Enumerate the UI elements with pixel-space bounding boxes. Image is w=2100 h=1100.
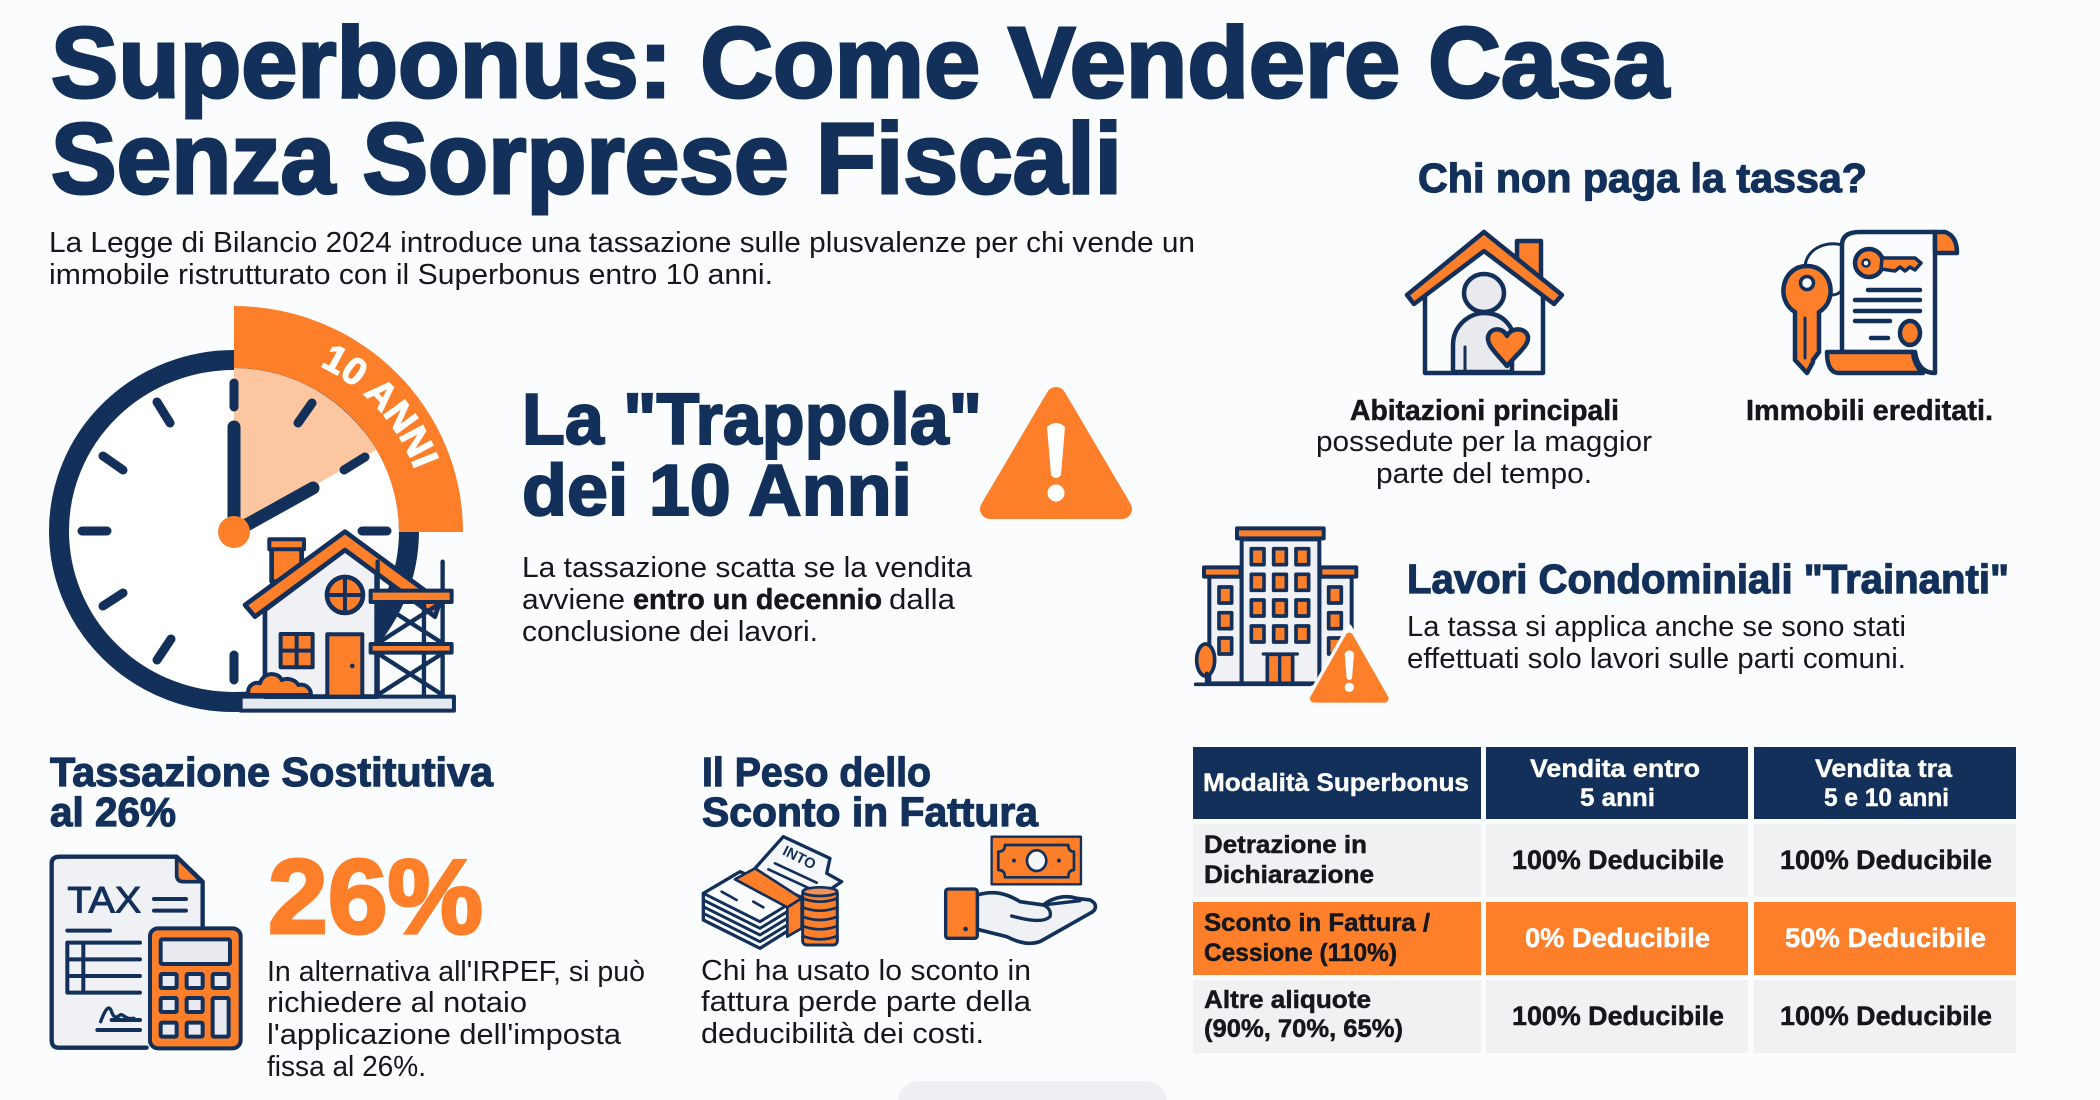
table: superbonus deducibility <box>1193 747 2016 1053</box>
table header: Vendita entro <box>1530 755 1700 783</box>
icon: stack of invoices and coins <box>703 837 842 948</box>
text: abitazioni principali: possedute per la maggior <box>1316 426 1652 458</box>
title: Senza Sorprese Fiscali <box>51 103 1122 215</box>
text: immobili ereditati: Immobili ereditati. <box>1746 395 1993 427</box>
text: trappola description <box>522 552 973 648</box>
footer pill (cut off) <box>898 1081 1167 1100</box>
text: sconto in fattura description: deducibilità dei costi. <box>701 1018 984 1050</box>
table row: sconto in fattura: Sconto in Fattura / <box>1204 909 1430 937</box>
table row: sconto in fattura <box>1193 902 2016 975</box>
intro text <box>49 227 1195 291</box>
table row: sconto in fattura: 50% Deducibile <box>1785 923 1986 953</box>
table row: detrazione in dichiarazione: Detrazione in <box>1204 831 1367 859</box>
table row: altre aliquote: 100% Deducibile <box>1780 1001 1992 1031</box>
table row: altre aliquote: 100% Deducibile <box>1512 1001 1724 1031</box>
heading: la trappola dei 10 anni: La "Trappola" <box>522 380 982 460</box>
icon: condominium building with warning <box>1196 528 1394 704</box>
text: sconto in fattura description: Chi ha usato lo sconto in <box>701 955 1031 987</box>
text: lavori condominiali trainanti: Lavori Condominiali "Trainanti" <box>1407 556 2009 602</box>
heading: chi non paga la tassa: Chi non paga la tassa? <box>1418 155 1867 201</box>
table row: detrazione in dichiarazione: 100% Deducibile <box>1780 845 1992 875</box>
heading: tassazione sostitutiva: al 26% <box>50 789 176 835</box>
icon: key and inheritance document <box>1783 232 1957 373</box>
stat: 26 percent: 26% <box>268 838 483 956</box>
icon: clock with house <box>49 306 463 713</box>
text: imposta sostitutiva: l'applicazione dell'imposta <box>267 1019 622 1051</box>
text: abitazioni principali: parte del tempo. <box>1376 458 1592 490</box>
title <box>51 7 1670 215</box>
text: imposta sostitutiva: fissa al 26%. <box>267 1051 426 1083</box>
icon: house with person and heart <box>1407 232 1562 373</box>
table header: Modalità Superbonus <box>1203 769 1469 797</box>
table row: sconto in fattura: Cessione (110%) <box>1204 939 1397 967</box>
icon: hand receiving banknote <box>946 837 1095 943</box>
text: trappola description: La tassazione scatta se la vendita <box>522 552 973 584</box>
text: abitazioni principali: Abitazioni principali <box>1350 395 1619 427</box>
icon: tax form and calculator: TAX <box>67 879 141 921</box>
icon: stack of invoices and coins: INTO <box>780 843 818 873</box>
table header: Vendita tra <box>1815 755 1953 783</box>
table header: 5 anni <box>1580 784 1655 812</box>
intro text: La Legge di Bilancio 2024 introduce una tassazione sulle plusvalenze per chi vende un <box>49 227 1195 259</box>
text: trappola description: conclusione dei lavori. <box>522 616 818 648</box>
text: imposta sostitutiva: richiedere al notaio <box>267 987 527 1019</box>
text: sconto in fattura description: fattura perde parte della <box>701 986 1032 1018</box>
table row: altre aliquote <box>1193 980 2016 1053</box>
text: sconto in fattura description <box>701 955 1032 1050</box>
text: imposta sostitutiva: In alternativa all'IRPEF, si può <box>267 956 645 988</box>
table row: altre aliquote: Altre aliquote <box>1204 986 1371 1014</box>
title: Superbonus: Come Vendere Casa <box>51 7 1670 119</box>
table row: altre aliquote: (90%, 70%, 65%) <box>1204 1015 1403 1043</box>
heading: la trappola dei 10 anni <box>522 380 982 531</box>
table row: detrazione in dichiarazione: 100% Deducibile <box>1512 845 1724 875</box>
heading: il peso dello sconto in fattura <box>702 749 1039 835</box>
intro text: immobile ristrutturato con il Superbonus entro 10 anni. <box>49 259 773 291</box>
table row: sconto in fattura: 0% Deducibile <box>1525 923 1710 953</box>
heading: il peso dello sconto in fattura: Sconto in Fattura <box>702 789 1039 835</box>
text: trappola description: avviene <box>522 584 625 616</box>
heading: tassazione sostitutiva: Tassazione Sostitutiva <box>50 749 494 795</box>
heading: tassazione sostitutiva <box>50 749 494 835</box>
icon: clock with house: 10 ANNI <box>321 346 439 468</box>
text: trappola description: entro un decennio <box>633 584 882 616</box>
table row: detrazione in dichiarazione: Dichiarazione <box>1204 861 1374 889</box>
text: imposta sostitutiva <box>267 956 645 1083</box>
icon: warning triangle <box>990 397 1122 509</box>
heading: il peso dello sconto in fattura: Il Peso dello <box>702 749 931 795</box>
table header: 5 e 10 anni <box>1824 784 1949 812</box>
table header <box>1193 747 2016 819</box>
icon: tax form and calculator <box>52 857 241 1048</box>
text: lavori condominiali trainanti <box>1407 556 2009 675</box>
text: lavori condominiali trainanti: effettuati solo lavori sulle parti comuni. <box>1407 643 1906 675</box>
text: abitazioni principali <box>1316 395 1652 490</box>
heading: la trappola dei 10 anni: dei 10 Anni <box>522 451 912 531</box>
table row: detrazione in dichiarazione <box>1193 824 2016 897</box>
text: lavori condominiali trainanti: La tassa si applica anche se sono stati <box>1407 611 1906 643</box>
text: trappola description: dalla <box>889 584 956 616</box>
